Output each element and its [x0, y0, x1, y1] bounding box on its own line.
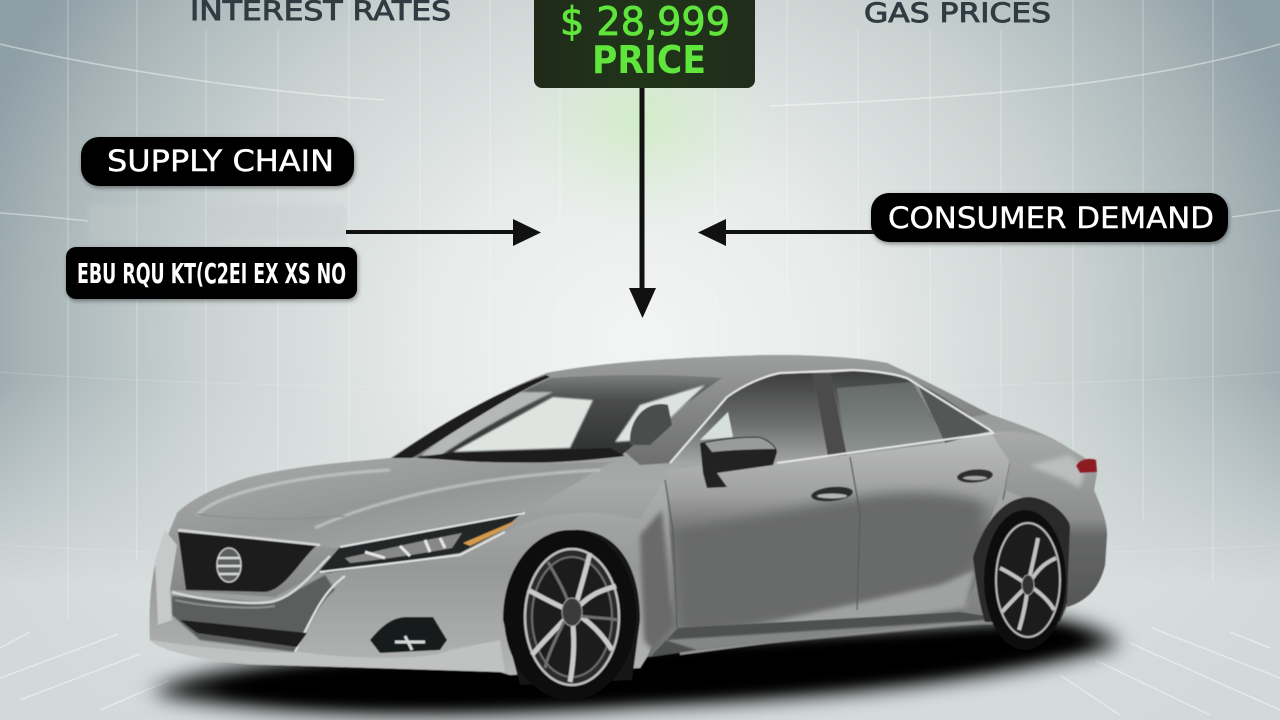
doors — [665, 432, 1010, 655]
headlight — [320, 512, 525, 573]
label: supply chain: SUPPLY CHAIN — [107, 144, 334, 178]
door handles — [810, 468, 993, 503]
fog lamp — [370, 617, 447, 653]
badge — [217, 548, 241, 582]
windshield — [417, 375, 722, 461]
side windows — [670, 370, 993, 463]
arrow: right to centre — [698, 219, 874, 246]
decorative faded patch — [88, 205, 346, 240]
front wheel — [503, 530, 640, 700]
label: consumer demand: CONSUMER DEMAND — [888, 201, 1214, 235]
label: garbled tag: EBU RQU KT(C2EI EX XS NO — [77, 257, 346, 290]
side mirror — [700, 437, 777, 488]
rear quarter — [990, 432, 1107, 607]
car body silhouette — [150, 355, 1107, 675]
hood — [177, 458, 612, 548]
rear wheel — [973, 497, 1070, 650]
front fender and bumper — [150, 480, 672, 675]
grille — [172, 530, 330, 608]
car — [150, 355, 1122, 714]
price value: $ 28,999 — [560, 0, 730, 45]
roof — [395, 355, 990, 465]
panel: price box — [534, 0, 755, 88]
label: consumer demand — [871, 193, 1228, 242]
price label: PRICE — [592, 38, 706, 82]
tail light — [1076, 459, 1097, 473]
ground shadow — [150, 618, 1122, 714]
arrow: left to centre — [346, 219, 541, 246]
label: garbled tag — [66, 247, 357, 299]
label: supply chain — [81, 137, 354, 186]
arrow: price down to car — [629, 88, 656, 318]
